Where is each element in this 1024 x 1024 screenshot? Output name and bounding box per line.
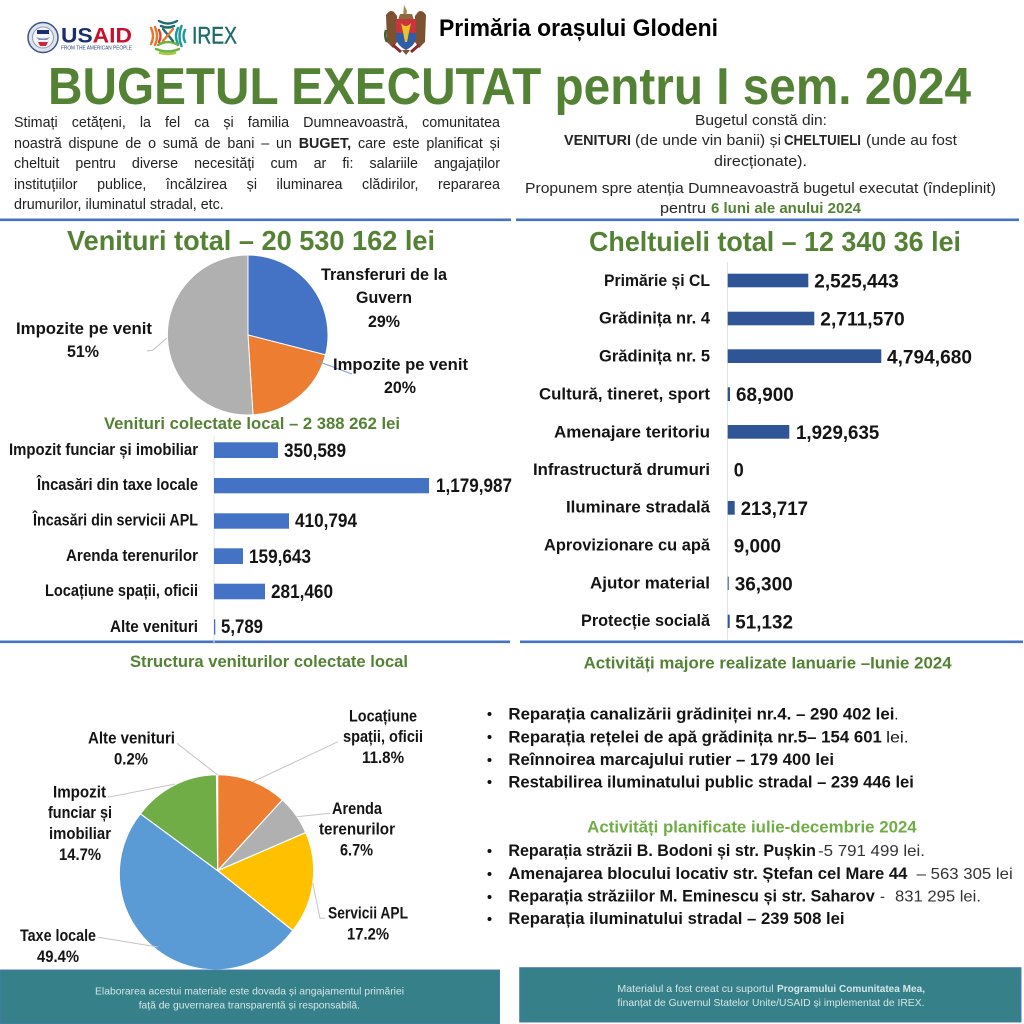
- bar chart: expenses: Cultură, tineret, sport: [539, 385, 711, 403]
- bar chart: locally collected revenue: Alte venituri: [110, 618, 198, 636]
- pie chart: total revenue: [16, 255, 469, 415]
- text block: budget introduction: instituțiilor publice, încălzirea și iluminarea clădirilor, repararea: [14, 177, 500, 193]
- pie chart: structure of locally collected revenue: Locațiune: [349, 708, 417, 726]
- list: planned activities: Amenajarea blocului locativ str. Ștefan cel Mare 44: [508, 865, 908, 883]
- bar chart: expenses: 4,794,680: [887, 347, 972, 368]
- bar chart: locally collected revenue: 281,460: [271, 582, 333, 603]
- heading: total expenses: Cheltuieli total – 12 340 36 lei: [589, 226, 961, 257]
- logo: USAID: USAID: [61, 24, 132, 48]
- bar chart: expenses: 1,929,635: [796, 423, 880, 444]
- list: planned activities: Reparația iluminatului stradal – 239 508 lei: [508, 910, 845, 928]
- bar chart: expenses: 2,711,570: [820, 310, 905, 331]
- pie chart: structure of locally collected revenue: Taxe locale: [20, 927, 96, 945]
- bar chart: expenses: 213,717: [741, 499, 808, 520]
- pie chart: structure of locally collected revenue: Impozit: [53, 783, 106, 801]
- bar chart: expenses: 2,525,443: [814, 272, 899, 293]
- pie chart: total revenue: 51%: [67, 343, 99, 361]
- footer panel: transparency commitment: [0, 970, 500, 1024]
- footer panel: transparency commitment: Elaborarea acestui materiale este dovada și angajamentul primăriei: [95, 985, 404, 997]
- pie chart: total revenue: Transferuri de la: [321, 266, 448, 284]
- list: planned activities: – 563 305 lei: [917, 866, 1013, 883]
- bar chart: expenses: Grădinița nr. 5: [599, 348, 710, 366]
- bar chart: locally collected revenue: [9, 436, 512, 644]
- list: planned activities: [488, 842, 1013, 928]
- bar chart: locally collected revenue: Locațiune spații, oficii: [45, 582, 198, 600]
- logo: IREX: IREX: [192, 23, 237, 50]
- list: completed activities: .: [894, 706, 898, 723]
- text block: what the budget consists of: (de unde vin banii) și: [635, 133, 781, 149]
- list: planned activities: Reparația străzii B. Bodoni și str. Pușkin: [508, 842, 816, 860]
- list: completed activities: Reparația canalizării grădiniței nr.4. – 290 402 lei: [508, 705, 894, 723]
- header: city hall name: Primăria orașului Glodeni: [439, 15, 718, 42]
- bar chart: expenses: Protecție socială: [581, 612, 711, 630]
- icon: coat of arms of Moldova: [385, 5, 426, 55]
- text block: budget introduction: noastră dispune de o sumă de bani – un BUGET, care este planificat și: [14, 136, 500, 152]
- list: planned activities: -5 791 499 lei.: [818, 843, 925, 860]
- text block: what the budget consists of: [525, 113, 996, 217]
- bar chart: expenses: Amenajare teritoriu: [554, 423, 710, 441]
- text block: budget introduction: drumurilor, iluminatul stradal, etc.: [14, 197, 224, 213]
- list: completed activities: lei.: [886, 729, 909, 746]
- list: completed activities: [488, 705, 914, 791]
- logo: IREX: [151, 21, 237, 54]
- list: completed activities: Reînnoirea marcajului rutier – 179 400 lei: [508, 751, 834, 769]
- bar chart: expenses: Aprovizionare cu apă: [544, 537, 711, 555]
- text block: budget introduction: cheltuit pentru diverse necesități cum ar fi: salariile angajaților: [14, 156, 500, 172]
- pie chart: structure of locally collected revenue: funciar și: [48, 804, 112, 822]
- pie chart: structure of locally collected revenue: 6.7%: [340, 841, 373, 859]
- pie chart: structure of locally collected revenue: Arenda: [332, 800, 383, 818]
- footer panel: program support: Materialul a fost creat cu suportul: [617, 983, 774, 995]
- pie chart: structure of locally collected revenue: 14.7%: [59, 846, 101, 864]
- pie chart: structure of locally collected revenue: Servicii APL: [328, 904, 408, 922]
- pie chart: structure of locally collected revenue: imobiliar: [49, 825, 112, 843]
- bar chart: expenses: [533, 262, 972, 640]
- pie chart: structure of locally collected revenue: 11.8%: [362, 749, 404, 767]
- heading: structure of locally collected revenue: Structura veniturilor colectate local: [130, 653, 408, 671]
- text block: what the budget consists of: direcționate).: [714, 154, 807, 170]
- bar chart: locally collected revenue: 1,179,987: [436, 476, 512, 497]
- list: planned activities: Reparația străziilor M. Eminescu și str. Saharov: [508, 887, 876, 905]
- heading: total revenue: Venituri total – 20 530 162 lei: [67, 225, 435, 256]
- bar chart: expenses: 0: [734, 461, 744, 482]
- text block: budget introduction: [14, 115, 500, 213]
- text block: what the budget consists of: 6 luni ale anului 2024: [711, 201, 862, 217]
- pie chart: structure of locally collected revenue: 17.2%: [347, 925, 389, 943]
- list: completed activities: Reparația rețelei de apă grădinița nr.5– 154 601: [508, 728, 882, 746]
- text block: what the budget consists of: CHELTUIELI: [784, 133, 861, 149]
- text block: what the budget consists of: VENITURI: [564, 133, 631, 149]
- bar chart: expenses: Ajutor material: [590, 574, 710, 592]
- pie chart: total revenue: 20%: [384, 379, 416, 397]
- list: planned activities: 831 295 lei.: [895, 888, 981, 905]
- bar chart: expenses: 36,300: [735, 575, 793, 596]
- pie chart: total revenue: Impozite pe venit: [333, 356, 469, 374]
- bar chart: locally collected revenue: 159,643: [249, 547, 311, 568]
- bar chart: locally collected revenue: 410,794: [295, 511, 357, 532]
- bar chart: locally collected revenue: Arenda terenurilor: [66, 547, 199, 565]
- bar chart: locally collected revenue: 5,789: [221, 617, 263, 638]
- pie chart: structure of locally collected revenue: Alte venituri: [88, 729, 175, 747]
- footer panel: program support: Programului Comunitatea Mea,: [777, 983, 925, 995]
- pie chart: structure of locally collected revenue: spații, oficii: [343, 728, 423, 746]
- footer panel: program support: finanțat de Guvernul Statelor Unite/USAID și implementat de IREX.: [617, 997, 924, 1009]
- bar chart: expenses: 68,900: [736, 385, 794, 406]
- bar chart: locally collected revenue: Impozit funciar și imobiliar: [9, 441, 199, 459]
- bar chart: expenses: Iluminare stradală: [566, 499, 711, 517]
- logo: USAID: [28, 22, 132, 52]
- pie chart: total revenue: 29%: [368, 313, 400, 331]
- bar chart: expenses: Grădinița nr. 4: [599, 310, 711, 328]
- bar chart: locally collected revenue: 350,589: [284, 441, 346, 462]
- footer panel: transparency commitment: față de guvernarea transparentă și responsabilă.: [139, 999, 360, 1011]
- bar chart: locally collected revenue: Încasări din taxe locale: [36, 475, 198, 494]
- pie chart: total revenue: Guvern: [356, 289, 412, 307]
- text block: what the budget consists of: Propunem spre atenția Dumneavoastră bugetul executat (îndeplinit): [525, 181, 996, 197]
- footer panel: program support: [520, 968, 1021, 1022]
- pie chart: structure of locally collected revenue: terenurilor: [319, 821, 396, 839]
- list: planned activities: -: [880, 888, 885, 905]
- pie chart: structure of locally collected revenue: [20, 708, 423, 970]
- text block: budget introduction: Stimați cetățeni, la fel ca și familia Dumneavoastră, comunitatea: [14, 115, 500, 131]
- heading: locally collected revenue: Venituri colectate local – 2 388 262 lei: [104, 415, 400, 433]
- bar chart: expenses: 9,000: [734, 537, 781, 558]
- text block: what the budget consists of: pentru: [660, 201, 706, 217]
- bar chart: expenses: Infrastructură drumuri: [533, 461, 710, 479]
- pie chart: structure of locally collected revenue: 0.2%: [114, 750, 148, 768]
- text block: what the budget consists of: (unde au fost: [866, 133, 957, 149]
- bar chart: expenses: 51,132: [735, 612, 793, 633]
- title: BUGETUL EXECUTAT pentru I sem. 2024: [48, 58, 971, 116]
- heading: planned activities: Activități planificate iulie-decembrie 2024: [587, 819, 918, 837]
- pie chart: structure of locally collected revenue: 49.4%: [37, 948, 79, 966]
- heading: major activities: Activități majore realizate Ianuarie –Iunie 2024: [584, 654, 952, 672]
- bar chart: locally collected revenue: Încasări din servicii APL: [32, 511, 198, 530]
- bar chart: expenses: Primărie și CL: [604, 272, 710, 290]
- text block: what the budget consists of: Bugetul constă din:: [695, 113, 827, 129]
- pie chart: total revenue: Impozite pe venit: [16, 320, 153, 338]
- list: completed activities: Restabilirea iluminatului public stradal – 239 446 lei: [508, 773, 914, 791]
- logo: USAID: FROM THE AMERICAN PEOPLE: [61, 46, 132, 52]
